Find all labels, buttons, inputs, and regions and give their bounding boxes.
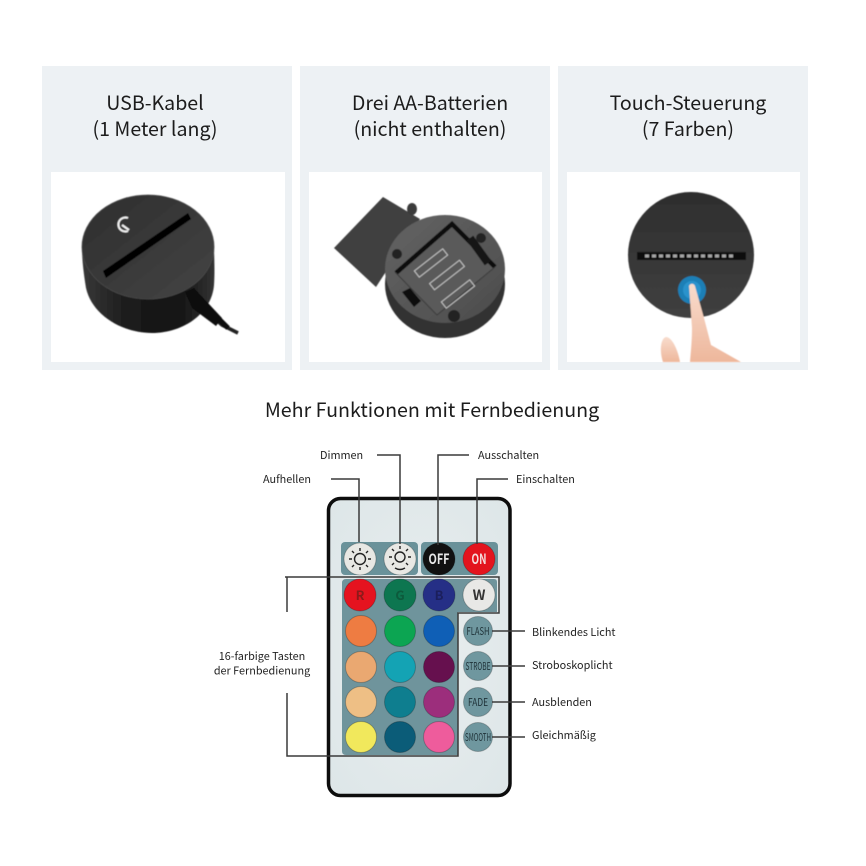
label: 16-farbige Tasten: 16-farbige Tasten (219, 648, 305, 664)
button: SMOOTH (464, 722, 492, 752)
button: G (384, 579, 416, 611)
callout lines (285, 455, 525, 756)
button: W (463, 579, 495, 611)
button: dimmer (384, 543, 416, 575)
heading: Touch-Steuerung: (7 Farben) (642, 113, 734, 142)
label: Blinkendes Licht: Blinkendes Licht (532, 624, 616, 640)
colour key field (342, 579, 497, 755)
heading: USB-Kabel: (1 Meter lang) (93, 113, 217, 142)
photo: finger touching base (628, 192, 754, 362)
button: G: G (395, 585, 405, 604)
label: Aufhellen: Aufhellen (263, 471, 311, 487)
label: Einschalten: Einschalten (516, 471, 575, 487)
button: SMOOTH: SMOOTH (465, 730, 491, 745)
label: Dimmen: Dimmen (320, 447, 363, 463)
button group: brightness (341, 542, 418, 575)
heading: Drei AA-Batterien: (nicht enthalten) (354, 113, 506, 142)
label: Gleichmäßig: Gleichmäßig (532, 727, 596, 743)
label: Ausschalten: Ausschalten (478, 447, 539, 463)
button: R: R (356, 585, 365, 604)
button: B (423, 579, 455, 611)
button: R (344, 579, 376, 611)
photo: battery compartment (334, 197, 505, 338)
button: W: W (473, 585, 486, 605)
button: OFF (423, 543, 455, 575)
label: 16-farbige Tasten: der Fernbedienung (214, 662, 310, 678)
button: FLASH (464, 616, 492, 646)
button: ON: ON (472, 549, 486, 569)
label: Ausblenden: Ausblenden (532, 694, 592, 710)
button: B: B (435, 585, 444, 604)
heading: Mehr Funktionen mit Fernbedienung: Mehr Funktionen mit Fernbedienung (265, 394, 599, 423)
button: STROBE (464, 652, 492, 680)
button: ON (463, 543, 495, 575)
panel: Touch-Steuerung (558, 66, 808, 370)
button: FLASH: FLASH (466, 623, 490, 639)
colour buttons grid (346, 616, 454, 752)
button: brighter (344, 543, 376, 575)
photo: lamp base with USB cable (82, 195, 238, 333)
heading: Touch-Steuerung: Touch-Steuerung (610, 87, 766, 116)
heading: Drei AA-Batterien: Drei AA-Batterien (352, 87, 508, 116)
button group: power (421, 542, 498, 575)
heading: USB-Kabel: USB-Kabel (106, 87, 204, 116)
panel: USB-Kabel (42, 66, 292, 370)
label: Stroboskoplicht: Stroboskoplicht (532, 657, 613, 673)
button: STROBE: STROBE (466, 658, 490, 674)
button: OFF: OFF (428, 549, 450, 569)
panel: Drei AA-Batterien (300, 66, 550, 370)
button: FADE: FADE (468, 694, 488, 710)
button: FADE (464, 688, 492, 716)
remote control (328, 498, 510, 796)
